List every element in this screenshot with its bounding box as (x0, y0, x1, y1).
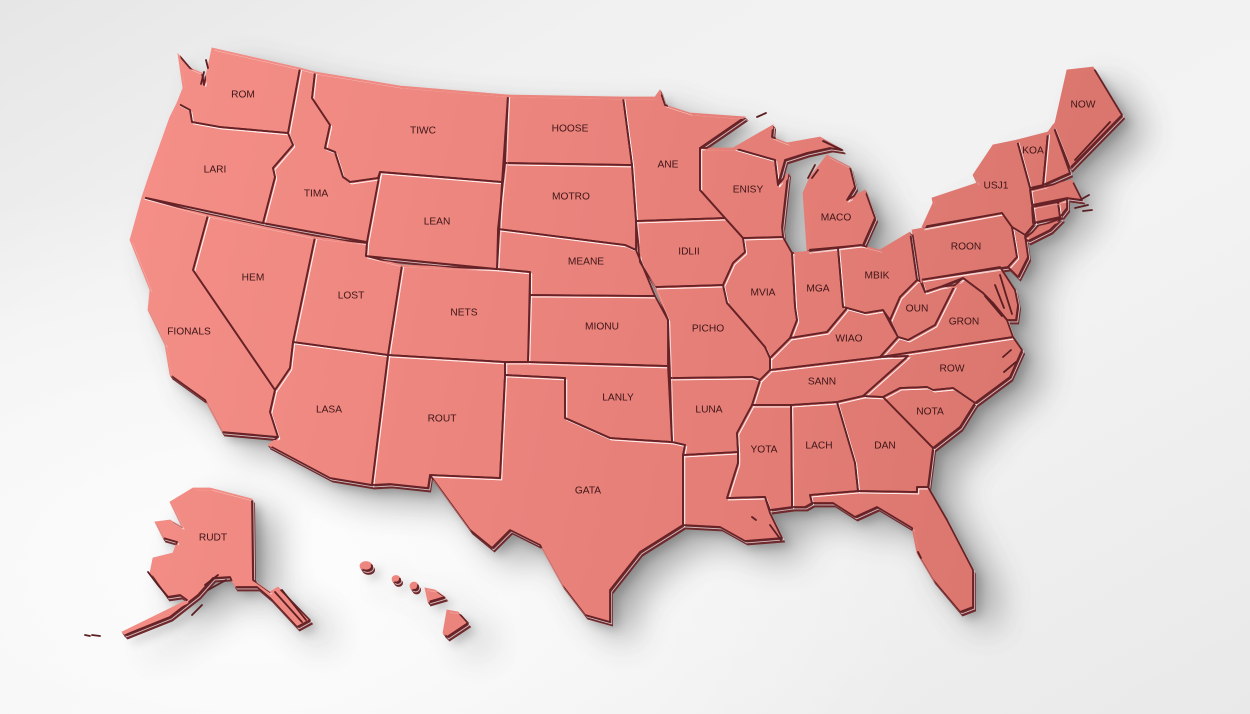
state: Virginia (880, 278, 1013, 357)
state: Colorado (388, 265, 530, 362)
label: Missouri: PICHO (692, 324, 724, 335)
label: Wisconsin: ENISY (733, 185, 763, 196)
label: Utah: LOST (338, 291, 364, 302)
label: Georgia: DAN (874, 441, 896, 452)
state: Missouri (655, 285, 770, 380)
coast details (85, 60, 1110, 636)
label: New York: USJ1 (984, 181, 1009, 192)
state: West Virginia (890, 280, 955, 340)
label: Kansas: MIONU (585, 322, 619, 333)
state: Michigan lower peninsula (803, 155, 875, 250)
state: Florida (810, 487, 973, 612)
state: Maine (1053, 67, 1122, 168)
state: Arizona (268, 342, 388, 485)
state: Maryland and Delaware (920, 267, 1018, 320)
label: California: FIONALS (167, 327, 211, 338)
label: Iowa: IDLII (678, 247, 700, 258)
label: Pennsylvania: ROON (951, 242, 981, 253)
state: California (130, 197, 278, 437)
label: Kentucky: WIAO (835, 334, 863, 345)
state: Idaho (263, 68, 380, 242)
label: Mississippi: YOTA (751, 445, 778, 456)
label: South Dakota: MOTRO (552, 192, 590, 203)
state: Georgia (837, 396, 933, 492)
label: Idaho: TIMA (304, 189, 328, 200)
state: New Hampshire (1043, 125, 1070, 185)
state: South Dakota (498, 163, 636, 250)
state border highlights (124, 50, 1124, 639)
state: North Carolina (863, 337, 1022, 403)
label: Ohio: MBIK (865, 271, 890, 282)
state: Michigan upper peninsula (733, 125, 843, 185)
state: Montana (312, 72, 508, 182)
map contact shadow (130, 56, 1130, 645)
map extrusion edge (123, 49, 1125, 641)
state: Alabama (791, 402, 858, 507)
state: Long Island (1025, 218, 1062, 241)
state: Louisiana (683, 452, 782, 541)
island: Hawaii (443, 610, 468, 637)
label: Alaska: RUDT (199, 533, 227, 544)
island: Maui (425, 588, 445, 602)
label: Nevada: HEM (242, 273, 264, 284)
state: Kentucky (770, 308, 898, 370)
state: Tennessee (752, 356, 908, 405)
state: Wyoming (366, 172, 502, 269)
state: Iowa (636, 218, 745, 287)
state: Arkansas (670, 377, 760, 455)
label: Michigan: MACO (821, 213, 851, 224)
state labels (167, 90, 1096, 544)
state: Ohio (838, 232, 917, 320)
island: Oahu (392, 576, 400, 582)
state: Washington (177, 48, 300, 133)
label: Texas: GATA (575, 486, 601, 497)
state: North Dakota (505, 95, 632, 165)
state border lines (122, 48, 1122, 637)
label: New Mexico: ROUT (428, 414, 456, 425)
state: Minnesota (623, 90, 745, 221)
label: North Carolina: ROW (940, 364, 965, 375)
state: Illinois (723, 237, 797, 358)
map soft shadow (146, 66, 1146, 655)
state: Alaska (122, 488, 310, 635)
state: New Mexico (372, 355, 505, 488)
state: Pennsylvania (912, 213, 1017, 280)
label: Minnesota: ANE (658, 160, 679, 171)
label: Oregon: LARI (204, 165, 226, 176)
label: Arkansas: LUNA (695, 405, 723, 416)
state: Nebraska (497, 229, 655, 296)
map faces (122, 48, 1122, 637)
state: South Carolina (883, 387, 975, 448)
label: Vermont: KOA (1022, 146, 1044, 157)
state: New Jersey (1008, 227, 1028, 277)
label: Montana: TIWC (410, 126, 436, 137)
label: Oklahoma: LANLY (602, 393, 634, 404)
island: Kauai (360, 562, 372, 570)
state: Wisconsin (700, 148, 788, 238)
state: Rhode Island (1058, 199, 1067, 217)
label: West Virginia: OUN (906, 304, 928, 315)
state: New York (922, 140, 1035, 235)
label: Tennessee: SANN (808, 377, 836, 388)
label: Nebraska: MEANE (568, 257, 604, 268)
label: South Carolina: NOTA (916, 407, 944, 418)
label: Alabama: LACH (805, 441, 833, 452)
label: Maine: NOW (1071, 100, 1096, 111)
state: Nevada (193, 215, 315, 390)
state: Massachusetts (1030, 180, 1082, 205)
label: Washington: ROM (231, 90, 255, 101)
state: Kansas (528, 295, 668, 366)
state: Mississippi (727, 405, 792, 510)
state: Oregon (142, 103, 293, 223)
state: Utah (293, 237, 402, 355)
label: Wyoming: LEAN (424, 217, 450, 228)
label: Arizona: LASA (316, 405, 342, 416)
label: North Dakota: HOOSE (552, 124, 589, 135)
label: Illinois: MVIA (751, 288, 776, 299)
island: Molokai (410, 582, 418, 590)
label: Virginia: GRON (949, 317, 979, 328)
state: Vermont (1017, 132, 1048, 188)
state: Indiana (790, 248, 847, 338)
state: Oklahoma (505, 362, 672, 442)
label: Indiana: MGA (806, 284, 830, 295)
label: Colorado: NETS (450, 308, 478, 319)
state: Connecticut (1032, 202, 1060, 223)
state: Texas (430, 375, 685, 622)
